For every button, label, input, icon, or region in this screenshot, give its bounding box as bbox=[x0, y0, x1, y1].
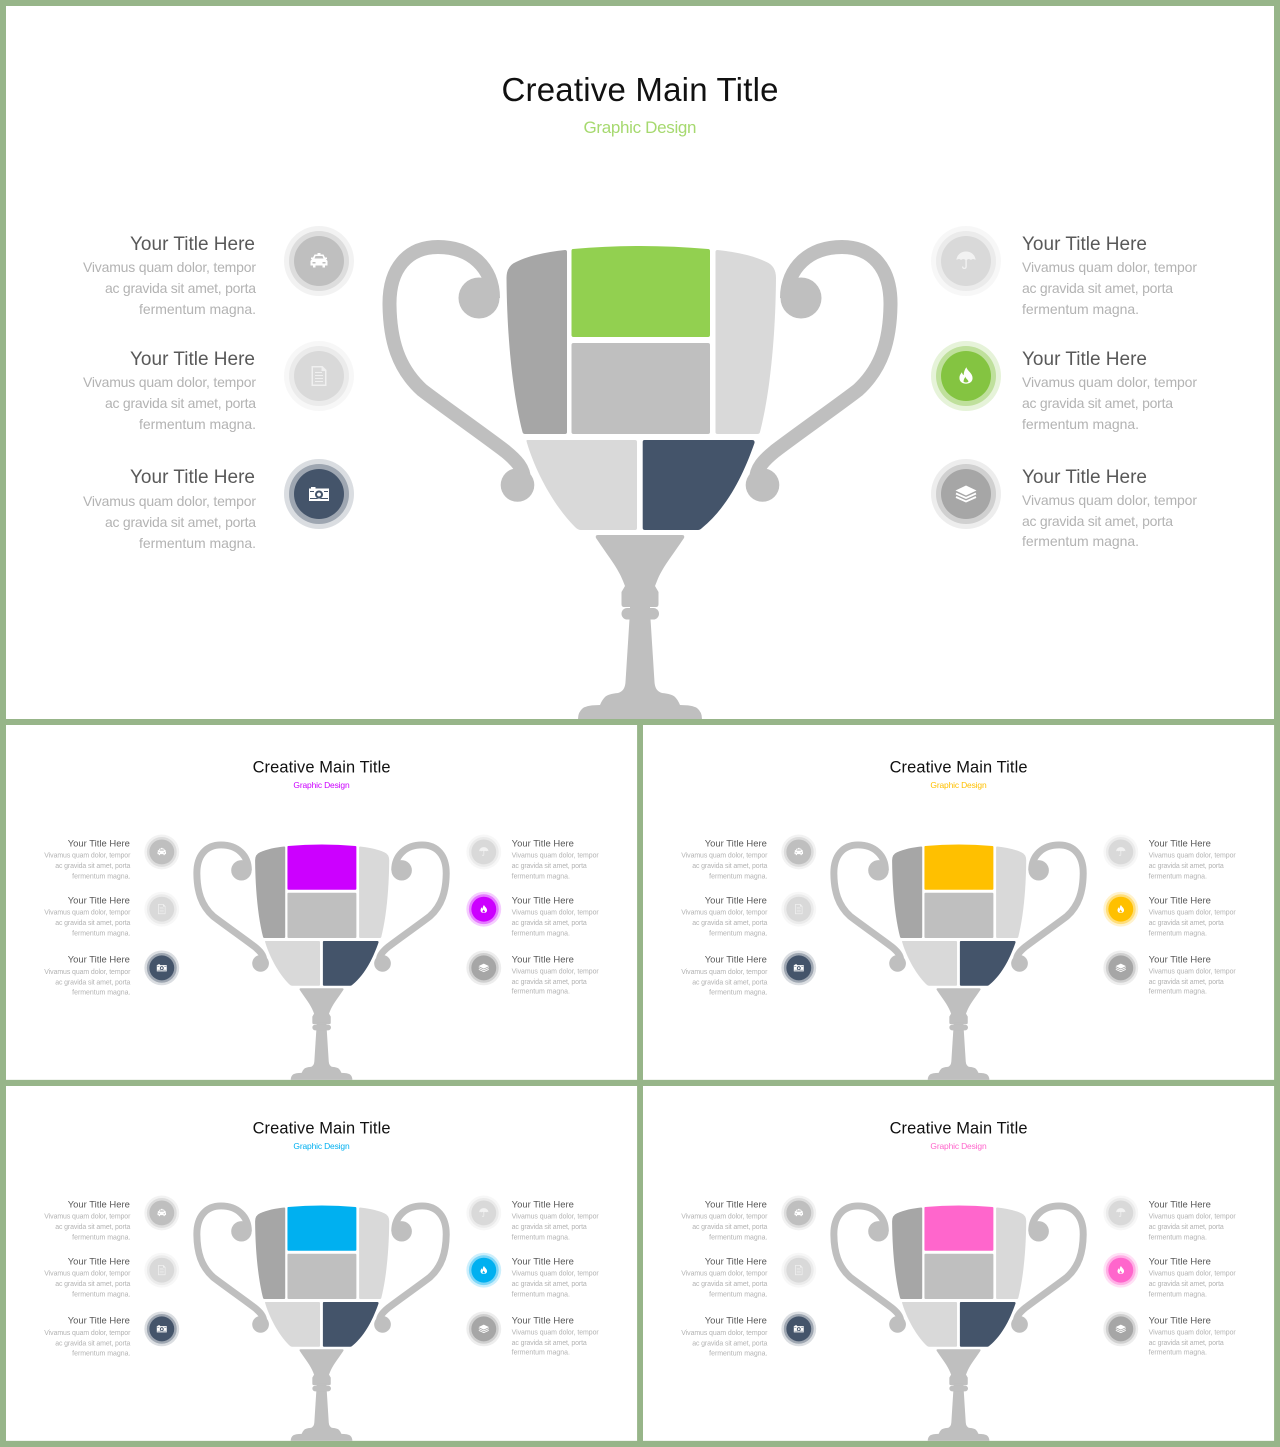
item: flame: Vivamus quam dolor, tempor bbox=[1022, 374, 1197, 390]
item: umbrella: fermentum magna. bbox=[1022, 301, 1139, 317]
panel: amber variant: ac gravida sit amet, porta bbox=[692, 979, 768, 986]
subtitle: Graphic Design bbox=[584, 118, 696, 137]
panel: purple variant: fermentum magna. bbox=[512, 931, 570, 938]
panel: purple variant: fermentum magna. bbox=[72, 931, 130, 938]
panel: blue variant: ac gravida sit amet, porta bbox=[55, 1340, 131, 1347]
panel: pink variant: Your Title Here bbox=[705, 1199, 767, 1210]
panel: amber variant: Vivamus quam dolor, tempor bbox=[681, 852, 768, 859]
panel: amber variant: fermentum magna. bbox=[709, 873, 767, 880]
panel: purple variant bbox=[6, 725, 637, 1080]
item: car bbox=[83, 226, 354, 317]
panel: purple variant: Vivamus quam dolor, tempor bbox=[44, 910, 131, 917]
panel: amber variant: ac gravida sit amet, porta bbox=[692, 863, 768, 870]
panel: amber variant: Your Title Here bbox=[1149, 896, 1211, 907]
panel: pink variant: ac gravida sit amet, porta bbox=[692, 1281, 768, 1288]
item: flame: Your Title Here bbox=[1022, 349, 1147, 370]
panel: purple variant: Vivamus quam dolor, tempor bbox=[512, 968, 599, 975]
panel: pink variant bbox=[643, 1086, 1274, 1441]
panel: amber variant: Vivamus quam dolor, tempor bbox=[681, 910, 768, 917]
panel: purple variant: ac gravida sit amet, porta bbox=[512, 863, 587, 870]
panel: purple variant: ac gravida sit amet, porta bbox=[55, 979, 131, 986]
panel: blue variant: Vivamus quam dolor, tempor bbox=[44, 1330, 131, 1337]
item: layers: fermentum magna. bbox=[1022, 533, 1139, 549]
panel: purple variant: Your Title Here bbox=[512, 896, 574, 907]
panel: blue variant: Graphic Design bbox=[293, 1141, 350, 1151]
item: document: Vivamus quam dolor, tempor bbox=[83, 374, 256, 390]
panel: blue variant: fermentum magna. bbox=[72, 1292, 130, 1299]
panel: pink variant: fermentum magna. bbox=[1149, 1234, 1207, 1241]
item: umbrella bbox=[931, 226, 1197, 317]
panel: amber variant: Vivamus quam dolor, tempor bbox=[1149, 968, 1236, 975]
panel: pink variant: fermentum magna. bbox=[1149, 1292, 1207, 1299]
panel: blue variant: Vivamus quam dolor, tempor bbox=[512, 1271, 599, 1278]
item: car: fermentum magna. bbox=[139, 301, 256, 317]
panel: purple variant: Vivamus quam dolor, tempor bbox=[44, 852, 131, 859]
panel: amber variant: Vivamus quam dolor, tempor bbox=[681, 969, 768, 976]
panel: pink variant: Creative Main Title bbox=[890, 1119, 1027, 1137]
panel: amber variant: Your Title Here bbox=[705, 954, 767, 965]
item: camera: Vivamus quam dolor, tempor bbox=[83, 493, 256, 509]
panel: purple variant: Vivamus quam dolor, tempor bbox=[44, 969, 131, 976]
panel: blue variant: ac gravida sit amet, porta bbox=[55, 1281, 131, 1288]
panel: purple variant: Vivamus quam dolor, tempor bbox=[512, 910, 599, 917]
item: flame: ac gravida sit amet, porta bbox=[1022, 395, 1173, 411]
panel: pink variant: Your Title Here bbox=[705, 1315, 767, 1326]
panel: amber variant: fermentum magna. bbox=[1149, 989, 1207, 996]
item: umbrella: ac gravida sit amet, porta bbox=[1022, 280, 1173, 296]
panel: amber variant: Graphic Design bbox=[930, 780, 987, 790]
panel: pink variant: fermentum magna. bbox=[709, 1234, 767, 1241]
panel: amber variant: ac gravida sit amet, porta bbox=[1149, 979, 1224, 986]
panel: amber variant: ac gravida sit amet, porta bbox=[1149, 920, 1224, 927]
panel: purple variant: fermentum magna. bbox=[72, 990, 130, 997]
panel: blue variant: Vivamus quam dolor, tempor bbox=[512, 1329, 599, 1336]
panel: purple variant: fermentum magna. bbox=[512, 989, 570, 996]
panel: pink variant: ac gravida sit amet, porta bbox=[692, 1340, 768, 1347]
panel: blue variant: Your Title Here bbox=[512, 1315, 574, 1326]
panel: pink variant: ac gravida sit amet, porta bbox=[692, 1224, 768, 1231]
item: document: ac gravida sit amet, porta bbox=[105, 395, 256, 411]
trophy illustration bbox=[389, 246, 891, 719]
panel: amber variant: Your Title Here bbox=[1149, 954, 1211, 965]
panel: blue variant: Vivamus quam dolor, tempor bbox=[512, 1213, 599, 1220]
item: document: Your Title Here bbox=[130, 349, 255, 370]
panel: pink variant: Vivamus quam dolor, tempor bbox=[681, 1330, 768, 1337]
panel: blue variant: Vivamus quam dolor, tempor bbox=[44, 1213, 131, 1220]
panel: pink variant: fermentum magna. bbox=[709, 1351, 767, 1358]
panel: blue variant: fermentum magna. bbox=[512, 1350, 570, 1357]
panel: blue variant: ac gravida sit amet, porta bbox=[55, 1224, 131, 1231]
panel: purple variant: Your Title Here bbox=[512, 838, 574, 849]
panel: blue variant: Creative Main Title bbox=[253, 1119, 390, 1137]
panel: blue variant: Your Title Here bbox=[512, 1257, 574, 1268]
panel: amber variant: Vivamus quam dolor, tempor bbox=[1149, 852, 1236, 859]
panel: blue variant: fermentum magna. bbox=[72, 1234, 130, 1241]
item: document bbox=[83, 341, 354, 432]
panel: blue variant: Your Title Here bbox=[512, 1199, 574, 1210]
panel: blue variant bbox=[6, 1086, 637, 1441]
panel: purple variant: Vivamus quam dolor, tempor bbox=[512, 852, 599, 859]
panel: amber variant: ac gravida sit amet, porta bbox=[1149, 863, 1224, 870]
item: camera: Your Title Here bbox=[130, 467, 255, 488]
panel: pink variant: ac gravida sit amet, porta bbox=[1149, 1340, 1224, 1347]
item: car: ac gravida sit amet, porta bbox=[105, 280, 256, 296]
item: document: fermentum magna. bbox=[139, 416, 256, 432]
panel: purple variant: Your Title Here bbox=[512, 954, 574, 965]
panel: pink variant: Vivamus quam dolor, tempor bbox=[681, 1213, 768, 1220]
panel: purple variant: fermentum magna. bbox=[512, 873, 570, 880]
item: camera: ac gravida sit amet, porta bbox=[105, 514, 256, 530]
panel: pink variant: Your Title Here bbox=[1149, 1257, 1211, 1268]
panel: blue variant: ac gravida sit amet, porta bbox=[512, 1224, 587, 1231]
panel: pink variant: fermentum magna. bbox=[1149, 1350, 1207, 1357]
item: car: Your Title Here bbox=[130, 234, 255, 255]
panel: amber variant: fermentum magna. bbox=[709, 931, 767, 938]
panel: blue variant: Your Title Here bbox=[68, 1199, 130, 1210]
panel: amber variant bbox=[643, 725, 1274, 1080]
panel: pink variant: fermentum magna. bbox=[709, 1292, 767, 1299]
panel: amber variant: Your Title Here bbox=[705, 896, 767, 907]
panel: pink variant: Your Title Here bbox=[1149, 1199, 1211, 1210]
panel: amber variant: fermentum magna. bbox=[709, 990, 767, 997]
item: camera: fermentum magna. bbox=[139, 535, 256, 551]
panel: amber variant: fermentum magna. bbox=[1149, 873, 1207, 880]
panel: blue variant: Your Title Here bbox=[68, 1257, 130, 1268]
item: umbrella: Your Title Here bbox=[1022, 234, 1147, 255]
panel: amber variant: Your Title Here bbox=[1149, 838, 1211, 849]
item: flame: fermentum magna. bbox=[1022, 416, 1139, 432]
panel: pink variant: Vivamus quam dolor, tempor bbox=[1149, 1271, 1236, 1278]
panel: pink variant: Your Title Here bbox=[1149, 1315, 1211, 1326]
item: camera bbox=[83, 459, 354, 551]
panel: pink variant: ac gravida sit amet, porta bbox=[1149, 1281, 1224, 1288]
panel: blue variant: Your Title Here bbox=[68, 1315, 130, 1326]
panel: amber variant: Creative Main Title bbox=[890, 758, 1027, 776]
title: Creative Main Title bbox=[502, 71, 778, 108]
panel: purple variant: Your Title Here bbox=[68, 954, 130, 965]
panel: pink variant: Vivamus quam dolor, tempor bbox=[1149, 1329, 1236, 1336]
panel: pink variant: Vivamus quam dolor, tempor bbox=[681, 1271, 768, 1278]
panel: main slide green bbox=[6, 6, 1274, 719]
panel: pink variant: Your Title Here bbox=[705, 1257, 767, 1268]
item: flame bbox=[931, 341, 1197, 432]
panel: amber variant: fermentum magna. bbox=[1149, 931, 1207, 938]
panel: purple variant: ac gravida sit amet, porta bbox=[512, 920, 587, 927]
panel: purple variant: ac gravida sit amet, porta bbox=[55, 920, 131, 927]
panel: purple variant: Your Title Here bbox=[68, 838, 130, 849]
panel: pink variant: Vivamus quam dolor, tempor bbox=[1149, 1213, 1236, 1220]
panel: purple variant: ac gravida sit amet, porta bbox=[512, 979, 587, 986]
panel: blue variant: ac gravida sit amet, porta bbox=[512, 1281, 587, 1288]
item: car: Vivamus quam dolor, tempor bbox=[83, 259, 256, 275]
panel: amber variant: Your Title Here bbox=[705, 838, 767, 849]
panel: blue variant: Vivamus quam dolor, tempor bbox=[44, 1271, 131, 1278]
panel: purple variant: Creative Main Title bbox=[253, 758, 390, 776]
panel: pink variant: ac gravida sit amet, porta bbox=[1149, 1224, 1224, 1231]
panel: blue variant: fermentum magna. bbox=[512, 1234, 570, 1241]
panel: blue variant: ac gravida sit amet, porta bbox=[512, 1340, 587, 1347]
panel: pink variant: Graphic Design bbox=[930, 1141, 987, 1151]
panel: blue variant: fermentum magna. bbox=[512, 1292, 570, 1299]
item: layers: Vivamus quam dolor, tempor bbox=[1022, 492, 1197, 508]
item: layers bbox=[931, 459, 1197, 549]
item: layers: ac gravida sit amet, porta bbox=[1022, 513, 1173, 529]
panel: blue variant: fermentum magna. bbox=[72, 1351, 130, 1358]
panel: purple variant: ac gravida sit amet, porta bbox=[55, 863, 131, 870]
panel: amber variant: Vivamus quam dolor, tempor bbox=[1149, 910, 1236, 917]
panel: amber variant: ac gravida sit amet, porta bbox=[692, 920, 768, 927]
panel: purple variant: Graphic Design bbox=[293, 780, 350, 790]
item: layers: Your Title Here bbox=[1022, 467, 1147, 488]
panel: purple variant: Your Title Here bbox=[68, 896, 130, 907]
panel: purple variant: fermentum magna. bbox=[72, 873, 130, 880]
item: umbrella: Vivamus quam dolor, tempor bbox=[1022, 259, 1197, 275]
